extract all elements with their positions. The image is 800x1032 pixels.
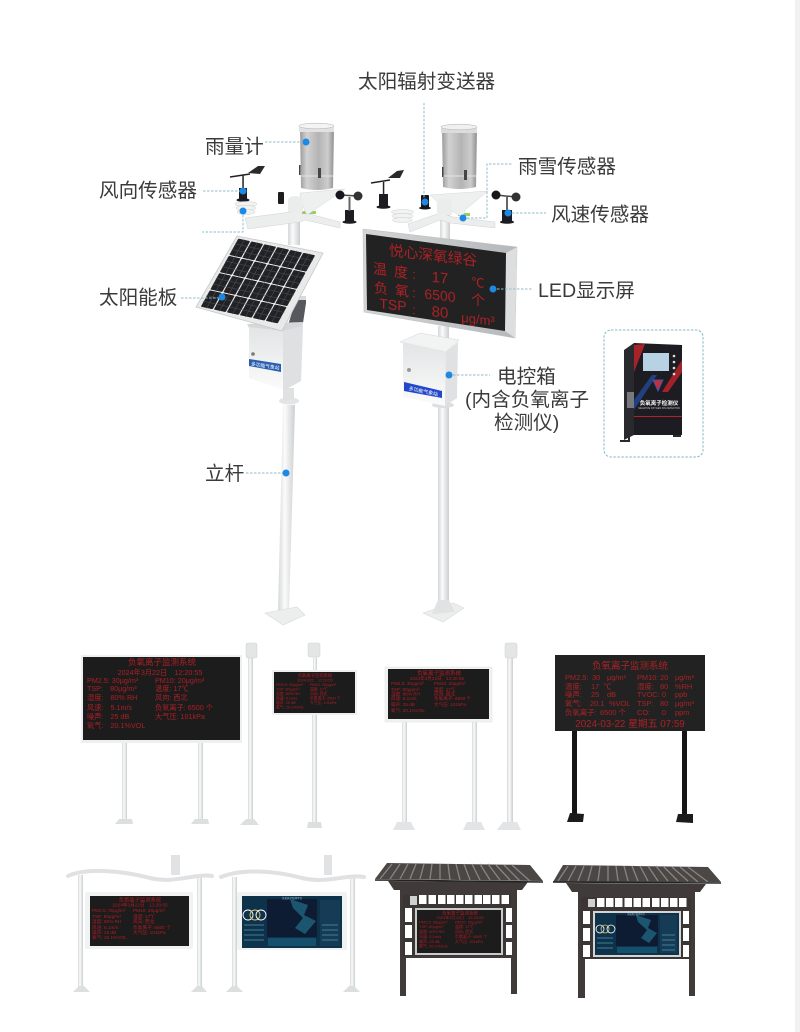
LED text: 噪声: 25 dB: [92, 929, 116, 936]
LED text: 80: [432, 303, 448, 322]
LED text: 80: [660, 682, 668, 691]
LED text: 风速: 5.1m/s: [92, 925, 119, 931]
LED text: 负氧离子监测系统: [592, 660, 668, 672]
product: arched frame with dashboard: [221, 855, 364, 992]
LED text: %RH: [675, 682, 692, 691]
LED text: 温: [373, 260, 387, 278]
LED text: :: [412, 302, 416, 317]
LED text: TSP: 80μg/m³: [276, 688, 300, 692]
LED text: PM10: 20μg/m³: [155, 676, 205, 685]
callout: 立杆: 立杆: [205, 463, 244, 485]
LED display: [363, 229, 517, 338]
callout: 电控箱: 电控箱: [497, 366, 556, 388]
product: medium LED board with two posts: [385, 667, 492, 830]
LED text: 湿度: 80% RH: [87, 693, 137, 702]
LED text: 温度: 17℃: [133, 913, 155, 920]
LED text: 负氧离子监测系统: [119, 896, 162, 904]
LED text: [276, 672, 341, 710]
LED text: 大气压: 101kPa: [455, 938, 484, 944]
LED text: ℃: [604, 682, 612, 691]
LED text: TSP: 80μg/m³: [419, 924, 444, 929]
posts and beams: [566, 883, 706, 998]
callout: 电控箱: [446, 366, 589, 434]
white lattice: [405, 895, 512, 955]
solar radiation sensor: [419, 195, 431, 210]
LED text: 风向: 西北: [133, 918, 155, 925]
LED text: 负氧离子:: [565, 708, 597, 717]
LED text: 氧气: 20.1%VOL: [276, 704, 304, 710]
anemometer: [336, 190, 362, 224]
LED text: 湿度: 80% RH: [276, 691, 300, 696]
roof: [553, 865, 721, 883]
LED text: 风速: 5.1m/s: [419, 933, 441, 939]
callouts: [99, 71, 649, 485]
LED text: 氧气:: [565, 699, 582, 708]
LED text: 6500: [424, 285, 456, 305]
LED text: TSP: 80μg/m³: [87, 684, 137, 693]
LED text: PM2.5:: [565, 673, 588, 682]
LED text: 氧气: 20.1%VOL: [92, 934, 127, 941]
LED text: 噪声: 25 dB: [419, 938, 440, 944]
LED text: 30: [592, 673, 600, 682]
LED text: TSP: 80μg/m³: [92, 914, 121, 919]
LED text: 负氧离子监测系统: [442, 910, 478, 916]
LED text: 17: [432, 269, 448, 288]
LED text: 大气压: 101kPa: [133, 929, 166, 936]
LED text: PM10:: [637, 673, 658, 682]
LED text: %VOL: [609, 699, 630, 708]
device feet: [620, 436, 681, 441]
callout: 太阳能板: 太阳能板: [99, 287, 177, 309]
mast stub: [283, 388, 294, 400]
LED text: [92, 896, 171, 941]
LED text: :: [412, 285, 416, 300]
LED text: 20.1: [590, 699, 604, 708]
callout: 风向传感器: [99, 180, 246, 202]
LED text: ℃: [472, 275, 484, 291]
callout: LED显示屏: LED显示屏: [538, 280, 635, 302]
callout: 太阳能板: [99, 287, 226, 309]
LED text: 0: [662, 708, 666, 717]
LED text: TSP:: [637, 699, 653, 708]
callout: 雨雪传感器: [460, 156, 616, 222]
callout: unlabeled shield connector: [202, 208, 246, 232]
LED text: PM10: 20μg/m³: [455, 920, 483, 924]
LED text: 度: [394, 263, 408, 281]
LED text: 悦心深氧绿谷: [389, 242, 477, 270]
solar bracket: [288, 296, 306, 325]
louver shield: [235, 202, 257, 214]
cross arm: [245, 211, 340, 229]
LED text: [373, 240, 495, 329]
callout: 雨量计: 雨量计: [205, 136, 264, 158]
callout: LED显示屏: [490, 280, 635, 302]
LED text: dB: [607, 690, 616, 699]
product: pavilion with dashboard: [553, 865, 721, 998]
control box: 多功能气象站: [408, 385, 439, 398]
product: arched frame with LED board: [68, 855, 212, 992]
anemometer: [492, 190, 520, 224]
LED text: 温度: 17℃: [155, 684, 189, 693]
LED text: 2024年3月22日 12:20:55: [436, 914, 484, 920]
product: large LED board with two posts and pole: [81, 643, 259, 825]
mast: [288, 218, 300, 245]
LED text: PM10: 20μg/m³: [434, 681, 466, 686]
roof: [375, 863, 543, 882]
product: standalone sensor pole: [497, 643, 521, 830]
LED text: 噪声: 25 dB: [87, 712, 130, 721]
LED text: 风向: 西北: [310, 691, 328, 696]
LED text: 负氧离子监测系统: [298, 672, 333, 679]
dashboard screen: [242, 896, 342, 948]
callout: 风速传感器: 风速传感器: [551, 204, 649, 226]
dome: [288, 196, 303, 212]
page edge strip: [795, 0, 800, 1032]
LED text: PM10: 20μg/m³: [310, 683, 337, 687]
LED text: PM10: 20μg/m³: [133, 908, 166, 913]
LED text: 20: [660, 673, 668, 682]
LED text: 负氧离子: 6500 个: [133, 924, 171, 931]
LED text: 2024-03-22 星期五 07:59: [575, 718, 685, 730]
LED text: PM2.5: 30μg/m³: [92, 908, 126, 913]
LED text: 负: [374, 279, 388, 297]
dashboard screen: 负氧离子监测平台: [627, 912, 646, 916]
louver shield: [392, 210, 414, 222]
LED text: 负氧离子: 6500 个: [434, 695, 471, 702]
device body: NEGATIVE OXYGEN ION DETECTOR: [638, 407, 680, 410]
LED text: 氧: [395, 282, 409, 300]
callout: 太阳辐射变送器: [358, 71, 496, 206]
panel: negative oxygen ion detector: [604, 330, 703, 457]
product: pavilion with LED board: [375, 863, 543, 996]
LED text: [565, 660, 695, 730]
LED text: 温度:: [565, 682, 582, 691]
LED text: TSP: [379, 295, 407, 314]
LED text: 2024年3月22日 12:20:55: [410, 675, 465, 682]
LED text: 噪声: 25 dB: [276, 700, 296, 705]
LED text: 负氧离子监测系统: [417, 669, 461, 677]
device body: 负氧离子检测仪: [640, 399, 679, 407]
LED text: ppm: [675, 708, 689, 717]
LED text: 湿度: 80% RH: [419, 928, 444, 934]
callout: 太阳辐射变送器: 太阳辐射变送器: [358, 71, 496, 93]
LED text: 氧气: 20.1%VOL: [419, 942, 449, 948]
LED text: [87, 657, 213, 730]
LED text: 风向: 西北: [434, 690, 455, 698]
LED text: μg/m³: [461, 310, 495, 329]
posts and beams: [388, 881, 528, 996]
LED text: PM2.5: 30μg/m³: [419, 920, 448, 924]
LED text: 负氧离子: 6500 个: [455, 933, 487, 939]
rain gauge: [299, 123, 345, 215]
LED text: 噪声:: [565, 690, 582, 699]
callout: 风向传感器: 风向传感器: [99, 180, 197, 202]
LED text: [391, 669, 471, 714]
LED text: 2024年3月22日 12:20:55: [112, 902, 168, 908]
LED text: 湿度:: [637, 682, 654, 691]
callout: 雨雪传感器: 雨雪传感器: [518, 156, 616, 178]
LED text: 大气压: 101kPa: [310, 700, 337, 705]
LED text: 2024年3月22日 12:20:55: [118, 668, 202, 677]
LED text: ppb: [675, 690, 687, 699]
LED text: :: [412, 267, 416, 282]
LED text: 负氧离子: 6500 个: [155, 703, 213, 712]
LED text: 80: [660, 699, 668, 708]
product: black-post LED board: [555, 655, 705, 823]
cross arm: [408, 213, 495, 232]
LED text: μg/m³: [675, 673, 695, 682]
pole base plate: [423, 600, 464, 622]
LED text: μg/m³: [607, 673, 627, 682]
right weather station: [363, 124, 520, 622]
white lattice: [583, 898, 689, 957]
wind vane: [230, 166, 265, 202]
callout: 电控箱: (内含负氧离子: [465, 389, 589, 411]
LED text: 负氧离子监测系统: [128, 657, 196, 667]
control box: [400, 333, 459, 406]
LED text: 大气压: 101kPa: [155, 712, 205, 721]
dashboard screen: 负氧离子监测平台: [282, 896, 302, 900]
dashboard screen: [595, 912, 679, 955]
LED text: 负氧离子: 6500 个: [310, 696, 341, 700]
LED text: 风向: 西北: [155, 693, 188, 702]
control box: [247, 322, 303, 391]
LED text: 风速: 5.1m/s: [276, 696, 297, 700]
LED text: 个: [471, 291, 485, 309]
rain gauge: [430, 124, 488, 217]
dome: [437, 198, 452, 215]
pole collar: [279, 398, 299, 404]
LED text: 0: [662, 690, 666, 699]
device body: [624, 343, 682, 440]
pole base plate: [265, 607, 305, 625]
callout: 雨量计: [205, 136, 310, 158]
LED text: 温度: 17℃: [455, 923, 474, 929]
control box: 多功能气象站: [250, 360, 280, 372]
LED text: PM2.5: 30μg/m³: [87, 676, 139, 685]
mast: [440, 213, 450, 243]
LED text: μg/m³: [675, 699, 695, 708]
small black sensor: [278, 192, 284, 204]
LED text: TVOC:: [637, 690, 660, 699]
LED text: 风向: 西北: [455, 928, 473, 934]
pole: [438, 326, 449, 608]
LED text: 风速: 5.1m/s: [87, 703, 133, 712]
LED text: 2024/3/22 12:20:55: [297, 678, 333, 682]
LED text: 6500 个: [600, 708, 626, 717]
LED text: 风速: 5.1m/s: [391, 696, 417, 702]
LED text: [419, 910, 487, 948]
LED text: 噪声: 25 dB: [391, 701, 415, 708]
LED text: TSP: 80μg/m³: [391, 687, 420, 692]
callout: 风速传感器: [504, 204, 649, 226]
LED text: 湿度: 80% RH: [92, 918, 121, 925]
LED text: 温度: 17℃: [434, 686, 456, 693]
callout: 立杆: [205, 463, 290, 485]
LED text: PM2.5: 30μg/m³: [391, 681, 424, 686]
collar: [432, 402, 454, 408]
LED text: 温度: 17℃: [310, 686, 328, 692]
LED text: PM2.5: 30μg/m³: [276, 683, 304, 687]
wind vane: [371, 170, 404, 209]
LED text: 湿度: 80% RH: [391, 690, 420, 698]
LED text: 氧气: 20.1%VOL: [87, 721, 145, 730]
LED text: CO:: [637, 708, 650, 717]
LED text: 氧气: 20.1%VOL: [391, 707, 425, 714]
LED text: 17: [591, 682, 599, 691]
left weather station: [196, 123, 362, 625]
LED text: 25: [591, 690, 599, 699]
solar panel: [196, 236, 323, 331]
callout: 电控箱: 检测仪): [494, 412, 559, 434]
pole: [278, 405, 295, 613]
LED text: 大气压: 101kPa: [434, 701, 466, 708]
product: small LED board single pole: [272, 643, 357, 828]
